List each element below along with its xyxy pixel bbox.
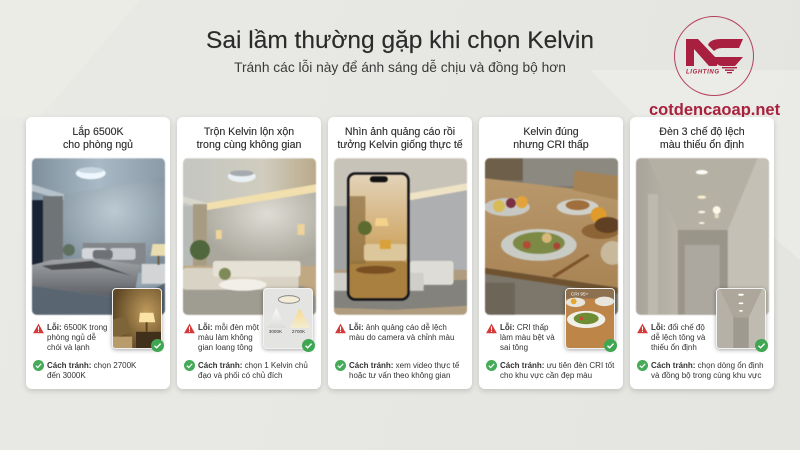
- subtitle: Tránh các lỗi này để ánh sáng dễ chịu và đồng bộ hơn: [234, 60, 566, 75]
- heading: Nhìn ảnh quảng cáo rồi: [345, 126, 455, 138]
- error text: Lỗi: CRI thấp: [500, 322, 548, 332]
- ok icon: [335, 360, 346, 371]
- error text: Lỗi: đổi chế độ: [651, 322, 705, 332]
- inset thumbnail: CRI 95+: [565, 288, 615, 349]
- error text: [651, 322, 706, 352]
- fix text: [500, 360, 614, 380]
- error text: gian loang tông: [198, 343, 253, 352]
- fix text: [651, 360, 764, 380]
- fix text: Cách tránh: chọn 1 Kelvin chủ: [198, 360, 308, 370]
- fix text: Cách tránh: xem video thực tế: [349, 360, 459, 370]
- heading: Đèn 3 chế độ lệch: [659, 126, 745, 138]
- heading: màu thiếu ổn định: [660, 138, 744, 150]
- heading: [196, 126, 301, 150]
- fix text: đến 3000K: [47, 371, 86, 380]
- fix text: [349, 360, 460, 380]
- heading: [513, 126, 589, 150]
- panel: mixed Kelvin: [177, 117, 321, 389]
- inset thumbnail: warm bedroom: [112, 288, 162, 349]
- panel: 3-mode lamp: [630, 117, 774, 389]
- panel: 6500K in bedroom: [26, 117, 170, 389]
- fix text: Cách tránh: chọn 2700K: [47, 360, 136, 370]
- website label: cotdencaoap.net: [649, 101, 780, 119]
- fix text: cho khu vực cần đẹp màu: [500, 371, 592, 380]
- fix text: và đồng bộ trong cùng khu vực: [651, 371, 761, 380]
- check badge: [302, 339, 315, 352]
- hallway photo: [636, 158, 770, 316]
- error text: phòng ngủ dễ: [47, 333, 96, 342]
- warning icon: [184, 324, 195, 334]
- ok icon: [637, 360, 648, 371]
- error text: thiếu ổn định: [651, 343, 697, 352]
- fix text: [47, 360, 136, 380]
- inset thumbnail: 3000K vs 2700K: 2700K: [292, 329, 305, 334]
- heading: trong cùng không gian: [197, 138, 301, 150]
- warning icon: [637, 324, 648, 334]
- error text: làm màu bệt và: [500, 333, 555, 342]
- logo: NC Lighting: LIGHTING: [686, 70, 719, 76]
- heading: [659, 126, 745, 150]
- ok icon: [33, 360, 44, 371]
- error text: màu do camera và chỉnh màu: [349, 333, 454, 342]
- error text: màu làm không: [198, 333, 253, 342]
- error text: [500, 322, 555, 352]
- error text: Lỗi: mỗi đèn một: [198, 322, 259, 332]
- ok icon: [486, 360, 497, 371]
- heading: Kelvin đúng: [523, 126, 579, 138]
- fix text: Cách tránh: chọn dòng ổn định: [651, 360, 764, 370]
- heading: [337, 126, 463, 150]
- check badge: [755, 339, 768, 352]
- error text: Lỗi: ảnh quảng cáo dễ lệch: [349, 322, 447, 332]
- error text: Lỗi: 6500K trong: [47, 322, 107, 332]
- heading: Trộn Kelvin lộn xộn: [204, 126, 294, 138]
- inset thumbnail: hallway: [716, 288, 766, 349]
- check badge: [151, 339, 164, 352]
- error text: [47, 322, 107, 352]
- panel: ad photos: [328, 117, 472, 389]
- phone and room photo: [333, 158, 468, 316]
- heading: nhưng CRI thấp: [513, 138, 589, 150]
- logo: NC Lighting: [674, 16, 754, 96]
- warning icon: [486, 324, 497, 334]
- inset thumbnail: CRI 95+: CRI 95+: [571, 292, 589, 298]
- bedroom photo: [31, 158, 166, 316]
- dining table photo: [484, 157, 619, 316]
- error text: sai tông: [500, 343, 528, 352]
- heading: Lắp 6500K: [72, 126, 124, 138]
- inset thumbnail: 3000K vs 2700K: 3000K: [269, 329, 282, 334]
- title: Sai lầm thường gặp khi chọn Kelvin: [206, 27, 594, 54]
- error text: dễ lệch tông và: [651, 333, 705, 342]
- fix text: Cách tránh: ưu tiên đèn CRI tốt: [500, 360, 614, 370]
- error text: [198, 322, 259, 352]
- panel: low CRI: [479, 117, 623, 389]
- ok icon: [184, 360, 195, 371]
- warning icon: [335, 324, 346, 334]
- fix text: đạo và phối có chủ đích: [198, 371, 283, 380]
- heading: tưởng Kelvin giống thực tế: [337, 138, 463, 150]
- warning icon: [33, 324, 44, 334]
- error text: chói và lạnh: [47, 343, 90, 352]
- fix text: hoặc tư vấn theo không gian: [349, 371, 450, 380]
- error text: [349, 322, 454, 342]
- check badge: [604, 339, 617, 352]
- heading: cho phòng ngủ: [63, 138, 133, 150]
- fix text: [198, 360, 308, 380]
- inset thumbnail: 3000K vs 2700K: [263, 288, 313, 349]
- heading: [63, 125, 133, 150]
- living room photo: [182, 158, 317, 316]
